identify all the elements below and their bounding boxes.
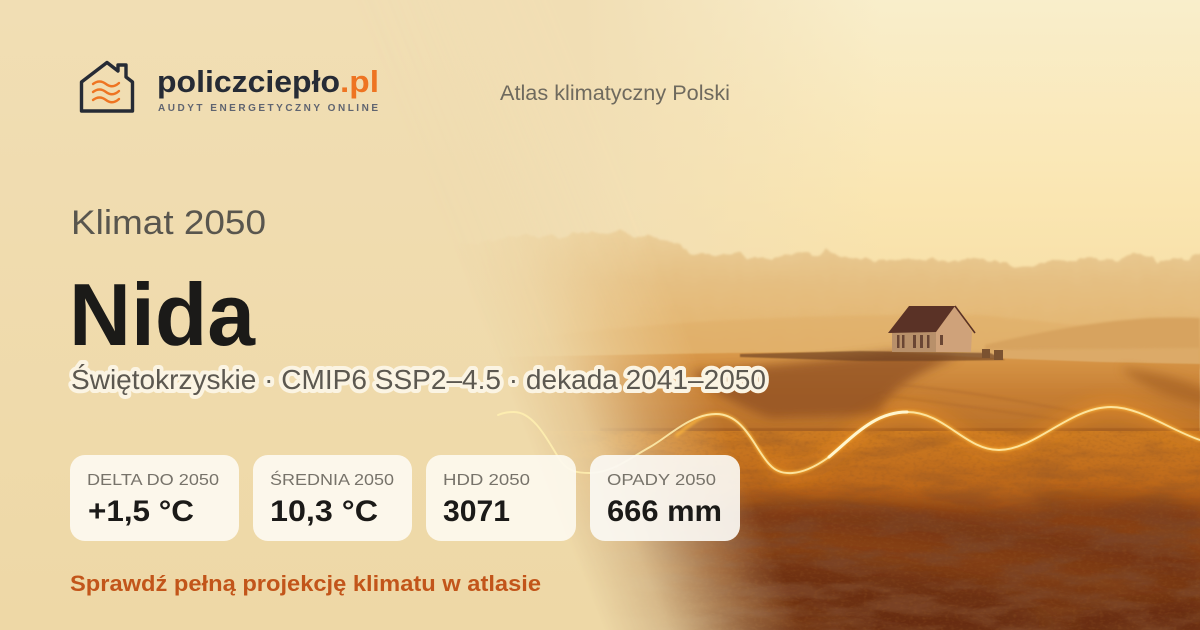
background landscape photo: [520, 0, 1200, 630]
wheat field: [557, 431, 1200, 630]
farmhouse on the hill: [740, 306, 1005, 361]
stat card: precipitation: OPADY 2050: [607, 472, 716, 489]
stat card: delta: DELTA DO 2050: [87, 472, 219, 489]
stat card: average: 10,3 °C: [270, 495, 378, 528]
stat card: HDD: HDD 2050: [443, 472, 530, 489]
stat card: delta: [70, 455, 239, 541]
logo wordmark: policzciepło: [157, 64, 340, 99]
logo wordmark: .pl: [340, 64, 379, 99]
call to action: Sprawdź pełną projekcję klimatu w atlasie: [70, 571, 541, 596]
logo wordmark: AUDYT ENERGETYCZNY ONLINE: [158, 103, 378, 114]
stat card: precipitation: 666 mm: [607, 495, 722, 528]
stat card: HDD: 3071: [443, 495, 510, 528]
stat card: average: [253, 455, 412, 541]
dunes: [524, 352, 1200, 431]
subtitle with halo: Świętokrzyskie · CMIP6 SSP2–4.5 · dekada 2041–2050: [71, 363, 766, 395]
stat card: HDD: [426, 455, 576, 541]
eyebrow: Klimat 2050: [71, 204, 266, 242]
stat card: precipitation: [590, 455, 740, 541]
header label: Atlas klimatyczny Polski: [500, 82, 730, 105]
dark furrows in wheat: [720, 498, 1200, 630]
logo: house icon with heat waves: [82, 62, 132, 111]
glowing temperature wave: [498, 407, 1200, 473]
distant tree line: [440, 233, 1200, 370]
logo wordmark: [157, 64, 379, 114]
hazy hills: [786, 316, 1009, 321]
stat card: delta: +1,5 °C: [88, 495, 194, 528]
stat card: average: ŚREDNIA 2050: [270, 470, 394, 489]
title: Nida: [69, 265, 256, 364]
horizon shadow: [632, 428, 1200, 431]
